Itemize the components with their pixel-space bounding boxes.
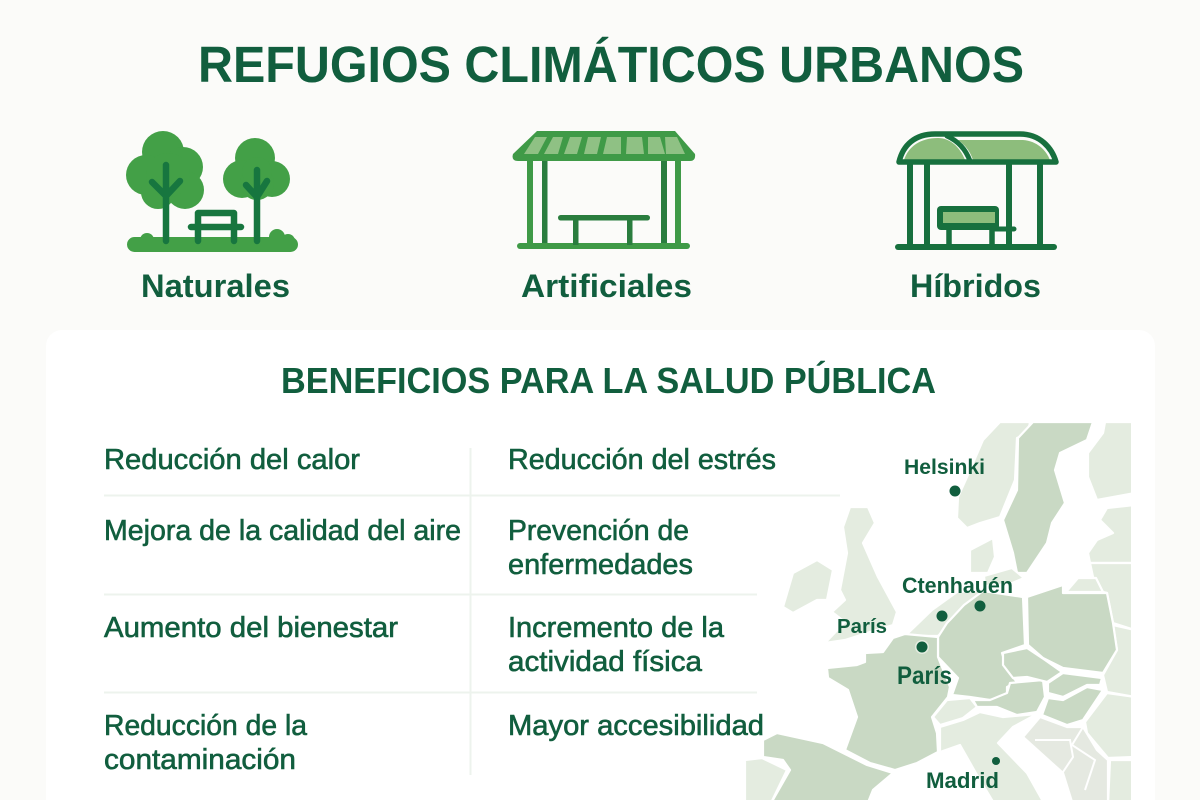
benefit list: left column: Aumento del bienestar bbox=[104, 612, 399, 644]
city markers and labels: Ctenhauén bbox=[902, 573, 1013, 598]
benefit list: right column: Reducción del estrés bbox=[508, 444, 776, 476]
icon: artificial shelter with slatted roof bbox=[513, 131, 695, 249]
city markers and labels: París bbox=[837, 616, 887, 638]
divider lines bbox=[104, 448, 840, 775]
benefit list: right column: Mayor accesibilidad bbox=[508, 710, 764, 742]
benefit list: left column: Reducción del calor bbox=[104, 444, 361, 476]
label: Híbridos: Híbridos bbox=[910, 268, 1041, 304]
heading: benefits: BENEFICIOS PARA LA SALUD PÚBLICA bbox=[281, 359, 936, 401]
benefit list: right column: Incremento de la bbox=[508, 612, 724, 644]
benefit list: right column: Prevención de bbox=[508, 515, 689, 547]
benefit list: right column bbox=[508, 444, 776, 742]
benefit list: right column: enfermedades bbox=[508, 549, 693, 581]
benefit list: right column: actividad física bbox=[508, 646, 702, 678]
benefit list: left column bbox=[104, 444, 461, 776]
benefit list: left column: Reducción de la bbox=[104, 710, 307, 742]
city markers and labels: Helsinki bbox=[904, 456, 985, 479]
label: Naturales: Naturales bbox=[141, 268, 290, 304]
icon: hybrid shelter with curved roof bbox=[898, 134, 1056, 247]
city markers and labels: Madrid bbox=[926, 768, 999, 793]
benefit list: left column: Mejora de la calidad del aire bbox=[104, 515, 461, 547]
city markers and labels: París bbox=[897, 662, 952, 690]
benefit list: left column: contaminación bbox=[104, 744, 296, 776]
panel: public health benefits bbox=[104, 360, 1131, 800]
map of Europe bbox=[745, 422, 1135, 800]
city markers and labels bbox=[837, 456, 1013, 793]
icon: natural shelter, trees and bench bbox=[126, 131, 298, 252]
title: REFUGIOS CLIMÁTICOS URBANOS bbox=[198, 36, 1024, 93]
label: Artificiales: Artificiales bbox=[521, 268, 692, 304]
